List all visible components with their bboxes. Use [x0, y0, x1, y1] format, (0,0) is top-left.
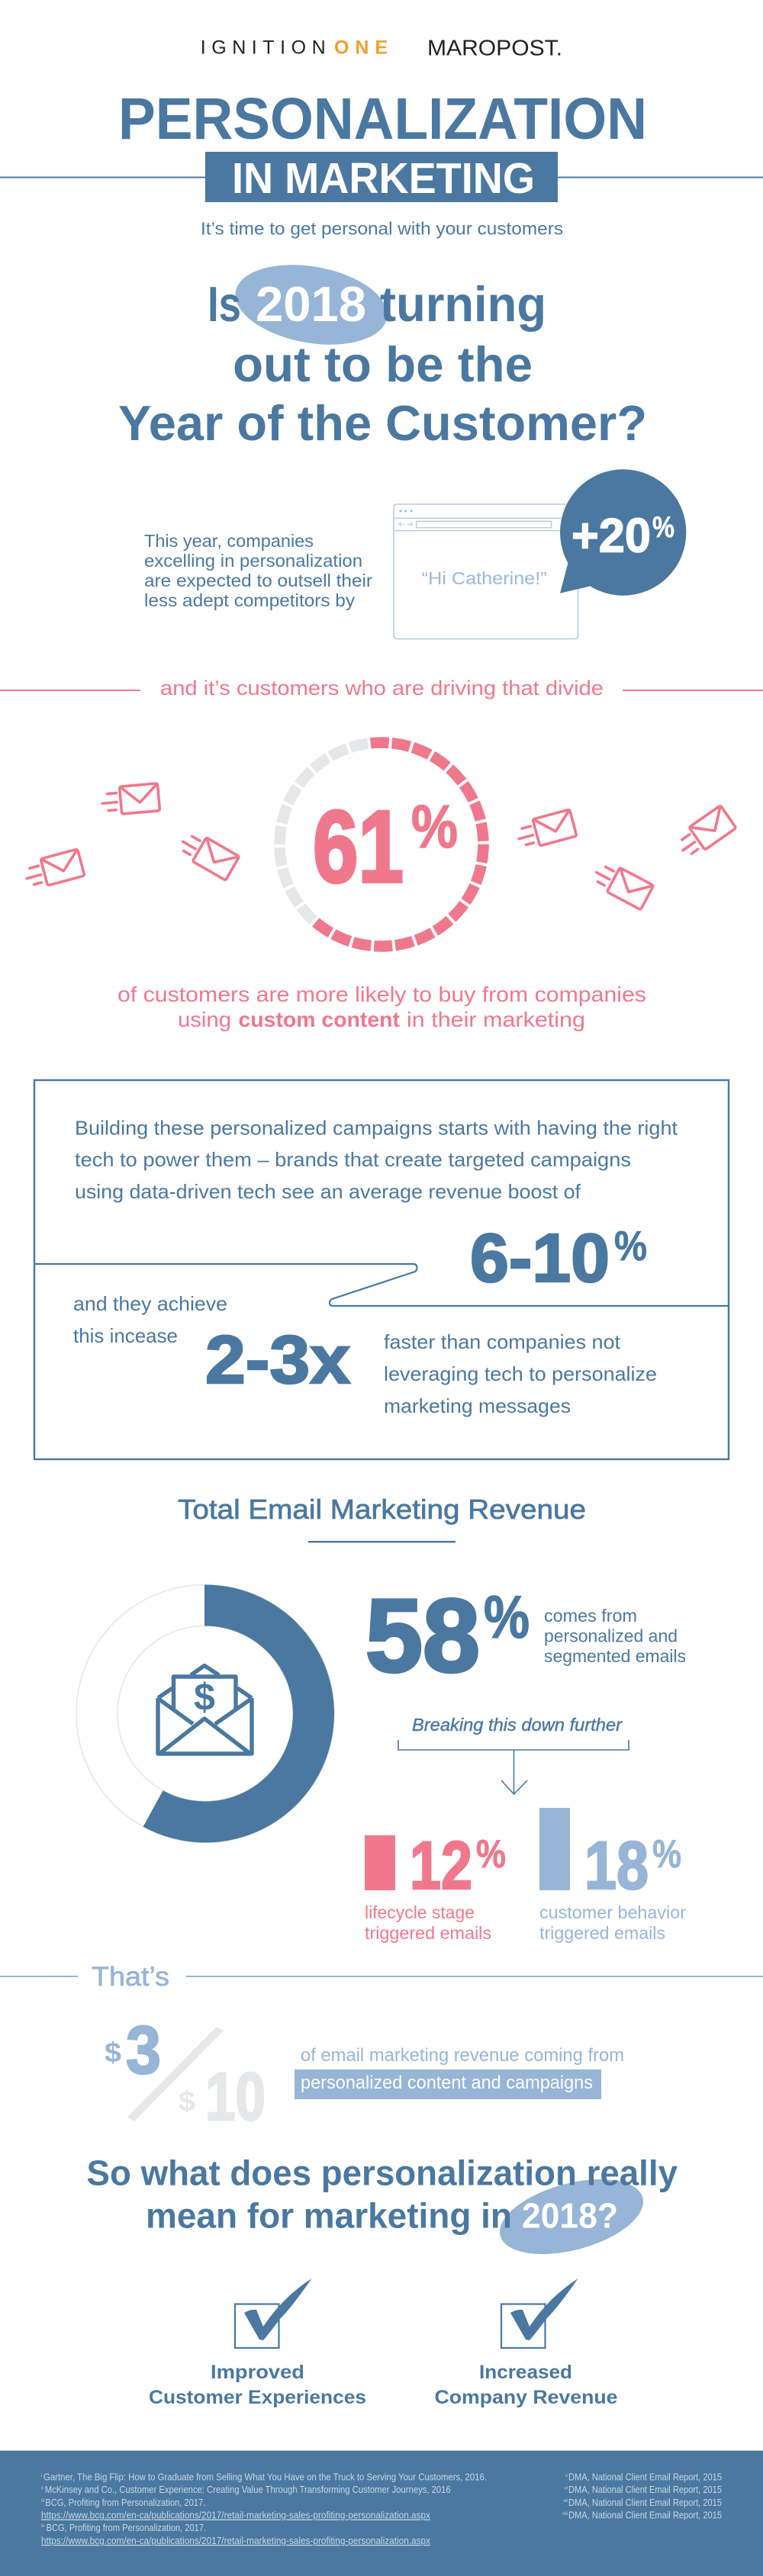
chart: 61% segmented ring — [269, 732, 494, 957]
text: increased company revenue — [435, 2362, 618, 2408]
text: faster than companies — [384, 1330, 657, 1417]
stat: 18% behavior: 18 — [584, 1827, 649, 1903]
logo: IgnitionOne — [201, 37, 388, 59]
stat: 12% lifecycle — [365, 1827, 506, 1943]
text: custom content stat: in their marketing — [407, 1008, 585, 1031]
icon: envelope with dollar — [158, 1666, 252, 1754]
tagline: It’s time to get personal with your customers — [201, 218, 563, 238]
icon: envelope with dollar: $ — [194, 1676, 215, 1719]
callout: +20% speech bubble — [560, 469, 686, 596]
text: improved customer experiences: Customer Experiences — [149, 2387, 366, 2408]
text: improved customer experiences — [149, 2362, 366, 2408]
text: intro: Building these personalized campaigns starts with having the right — [75, 1117, 678, 1140]
stat: 2-3x: 2-3x — [205, 1321, 350, 1397]
text: intro: tech to power them – brands that create targeted campaigns — [75, 1148, 631, 1171]
heading: Total Email Marketing Revenue: Total Email Marketing Revenue — [178, 1494, 586, 1525]
stat: 6-10%: 6-10 — [470, 1220, 610, 1297]
stat: 18% behavior: % — [652, 1832, 681, 1877]
stat: 18% behavior: customer behavior — [539, 1902, 686, 1922]
text: custom content stat — [118, 982, 646, 1031]
text: sources left: https://www.bcg.com/en-ca/publications/2017/retail-marketing-sales-profiting-personalization.aspx — [41, 2510, 431, 2521]
text: sources left: McKinsey and Co., Customer Experience: Creating Value Through Transforming Customer Journeys, 2016 — [45, 2484, 451, 2495]
divider speech notch — [34, 1264, 729, 1306]
text: sources right: DMA, National Client Email Report, 2015 — [568, 2497, 722, 2508]
heading: Year of the Customer: Is — [208, 276, 241, 332]
label: personalized content and campaigns — [295, 2069, 601, 2099]
stat: 12% lifecycle: % — [476, 1832, 506, 1877]
icon: checkbox increased — [501, 2279, 578, 2348]
text: sources right: vii — [563, 2499, 568, 2504]
icon: checkbox improved — [235, 2279, 311, 2348]
title banner: In Marketing — [0, 152, 763, 203]
text: faster than companies: leveraging tech to personalize — [384, 1362, 657, 1385]
text: and they achieve — [73, 1292, 227, 1347]
label: personalized content and campaigns: personalized content and campaigns — [301, 2073, 593, 2093]
stat: 6-10%: % — [614, 1222, 647, 1269]
text: intro: using data-driven tech see an average revenue boost of — [75, 1180, 581, 1203]
text: sources right: vi — [565, 2487, 568, 2491]
text: outsell competitors: excelling in personalization — [144, 551, 362, 571]
highlight ellipse — [229, 254, 394, 355]
callout: +20% speech bubble: % — [652, 511, 674, 544]
title banner: In Marketing: IN MARKETING — [232, 154, 535, 203]
text: sources left: BCG, Profiting from Personalization, 2017. — [45, 2497, 205, 2508]
text: outsell competitors — [144, 531, 372, 610]
text: outsell competitors: are expected to outsell their — [144, 571, 372, 590]
stat: 12% lifecycle: triggered emails — [365, 1923, 491, 1943]
chart: 61% segmented ring: 61 — [313, 790, 404, 904]
text: sources right: DMA, National Client Email Report, 2015 — [568, 2510, 722, 2521]
logo: IgnitionOne: IGNITION — [201, 37, 326, 59]
arrow: bracket down — [398, 1740, 629, 1794]
text: faster than companies: faster than companies not — [384, 1330, 621, 1353]
logo: IgnitionOne: ONE — [334, 37, 388, 59]
stat: $3 of $10: $ — [179, 2086, 195, 2117]
text: and they achieve: and they achieve — [73, 1292, 227, 1315]
text: comes from personalized: personalized and — [544, 1626, 678, 1646]
heading: what does personalization mean: mean for marketing in — [146, 2196, 512, 2236]
text: intro — [75, 1117, 678, 1203]
heading: Year of the Customer: Year of the Customer? — [118, 395, 647, 451]
stat: $3 of $10 — [105, 2012, 266, 2134]
text: custom content stat: using — [178, 1008, 231, 1031]
text: custom content stat: of customers are more likely to buy from companies — [118, 982, 646, 1006]
text: of email marketing revenue: of email marketing revenue coming from — [301, 2045, 624, 2066]
highlight ellipse — [491, 2166, 652, 2268]
text: increased company revenue: Increased — [479, 2362, 572, 2383]
divider heading: customers driving divide: and it’s customers who are driving that divide — [160, 677, 604, 699]
text: sources right: DMA, National Client Email Report, 2015 — [568, 2472, 722, 2483]
chart: 61% segmented ring: % — [411, 793, 458, 860]
callout: +20% speech bubble: +20 — [571, 510, 651, 563]
icon: browser window — [394, 504, 578, 639]
text: custom content stat: custom content — [238, 1008, 400, 1031]
text: sources left — [41, 2472, 487, 2546]
text: sources right: DMA, National Client Email Report, 2015 — [568, 2484, 722, 2495]
text: sources right — [562, 2472, 722, 2521]
text: comes from personalized: comes from — [544, 1606, 637, 1626]
heading: Year of the Customer: out to be the — [233, 336, 533, 392]
text: sources right: v — [565, 2474, 568, 2478]
text: and they achieve: this incease — [73, 1324, 178, 1347]
text: faster than companies: marketing messages — [384, 1394, 571, 1417]
heading: what does personalization mean: So what does personalization really — [87, 2153, 678, 2192]
text: sources left: iv — [41, 2524, 44, 2529]
stat: 58%: % — [484, 1583, 530, 1651]
text: sources right: viii — [562, 2512, 568, 2517]
stat: 58%: 58 — [365, 1577, 480, 1693]
panel: data-driven tech — [34, 1080, 729, 1459]
heading: Year of the Customer: turning — [380, 276, 546, 332]
text: breaking this down further: Breaking this down further — [412, 1715, 623, 1735]
logo: Maropost: MAROPOST. — [427, 36, 562, 60]
text: comes from personalized — [544, 1606, 686, 1666]
icon: browser window: “Hi Catherine!” — [422, 568, 547, 588]
heading: Year of the Customer: 2018 — [256, 276, 366, 332]
stat: 18% behavior: triggered emails — [539, 1923, 665, 1943]
stat: $3 of $10: 3 — [126, 2012, 161, 2088]
heading: what does personalization mean — [87, 2153, 678, 2268]
text: sources left: https://www.bcg.com/en-ca/publications/2017/retail-marketing-sales-profiting-personalization.aspx — [41, 2536, 431, 2546]
panel: footer sources — [0, 2450, 763, 2576]
text: sources left: BCG, Profiting from Personalization, 2017. — [47, 2523, 206, 2533]
text: outsell competitors: This year, companies — [144, 531, 314, 551]
text: sources left: Gartner, The Big Flip: How to Graduate from Selling What You Have on the Truck to Serving Your Customers, 2016. — [43, 2472, 487, 2483]
chart: 58% donut — [76, 1584, 334, 1843]
stat: 12% lifecycle: 12 — [410, 1827, 472, 1903]
text: comes from personalized: segmented emails — [544, 1646, 686, 1666]
heading: Year of the Customer — [118, 254, 647, 451]
stat: $3 of $10: 10 — [205, 2058, 266, 2134]
divider heading: That's: That’s — [92, 1962, 169, 1992]
text: sources left: ii — [41, 2487, 43, 2491]
text: outsell competitors: less adept competitors by — [144, 590, 356, 610]
title: Personalization: PERSONALIZATION — [118, 86, 647, 152]
text: increased company revenue: Company Revenue — [435, 2387, 618, 2408]
text: improved customer experiences: Improved — [211, 2362, 304, 2383]
text: sources left: i — [41, 2474, 42, 2478]
stat: $3 of $10: $ — [105, 2037, 121, 2068]
icon: flying envelopes — [23, 783, 736, 910]
text: sources left: iii — [41, 2499, 44, 2504]
heading: what does personalization mean: 2018? — [522, 2196, 618, 2236]
stat: 12% lifecycle: lifecycle stage — [365, 1902, 475, 1922]
stat: 18% behavior — [539, 1808, 686, 1943]
